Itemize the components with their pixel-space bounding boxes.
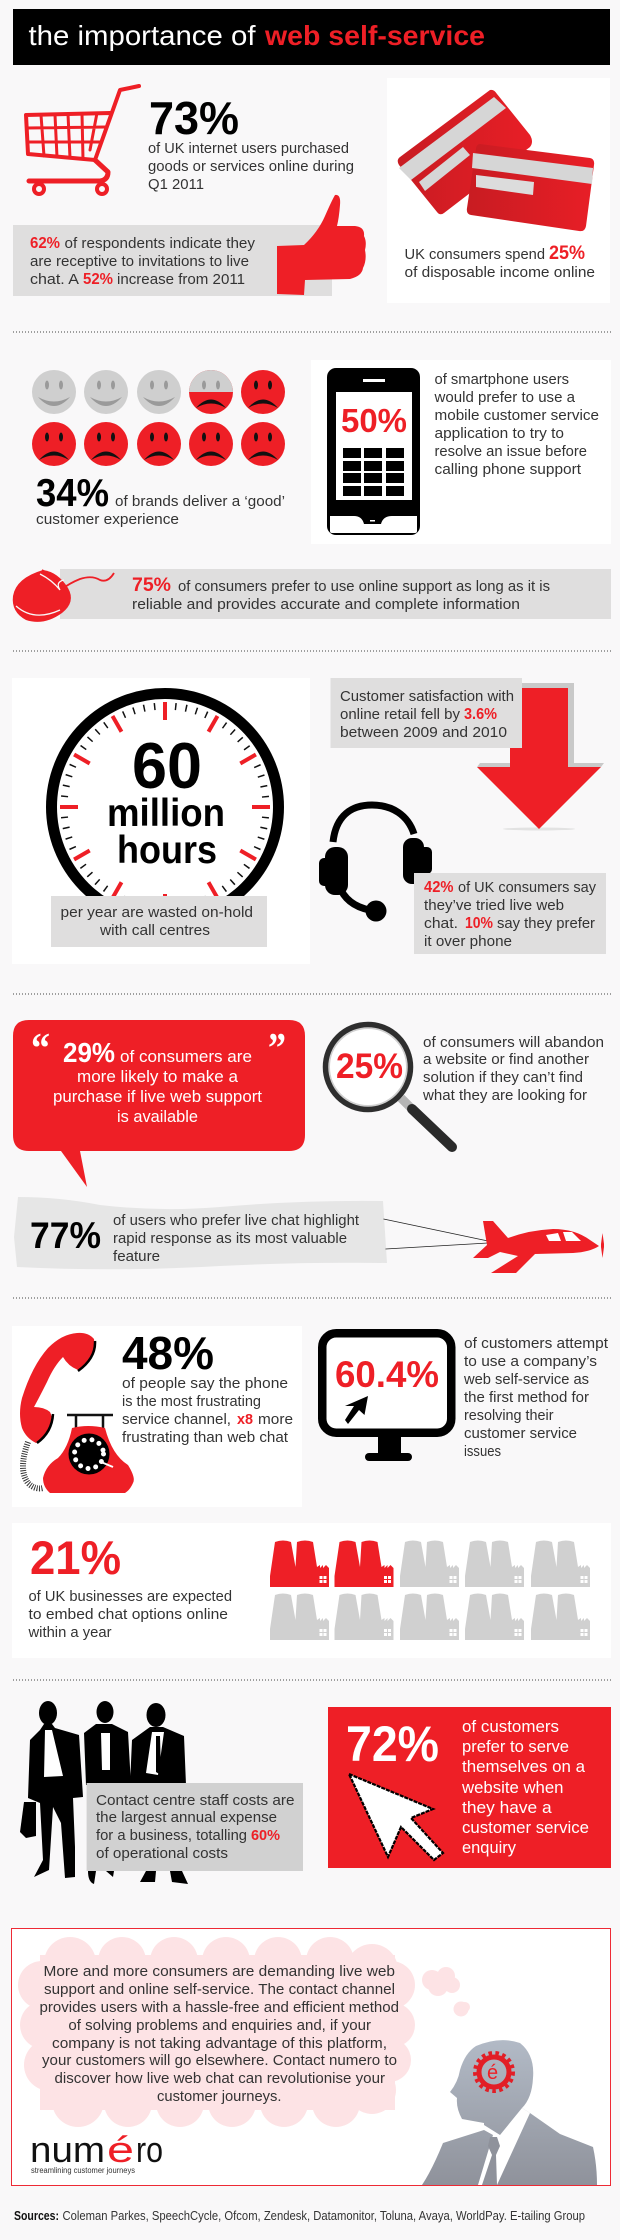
callout: 75 percent online support: 75%: [132, 575, 171, 596]
text: 48 percent phone frustrating: more: [258, 1411, 293, 1428]
icon: magnifying glass: [326, 1024, 452, 1147]
callout: 62 percent live chat: 62%: [30, 235, 60, 252]
callout: 42 percent live chat: 10%: [465, 915, 493, 932]
text: prefer to serve themselves: enquiry: [462, 1838, 516, 1857]
text: closing paragraph: [40, 1963, 399, 2105]
title banner: the importance of: [28, 20, 256, 51]
stat: 34 percent good experience: 34%: [36, 472, 109, 515]
stat: 73 percent online purchases: [148, 92, 354, 193]
callout: 42 percent live chat: say they prefer: [497, 915, 595, 932]
text: customers attempt web self-service: customer service: [464, 1425, 577, 1442]
text: 25 percent of income: 25%: [549, 243, 585, 264]
speech bubble: 29 percent: purchase if live web support: [53, 1087, 262, 1106]
text: abandon a website: what they are looking for: [422, 1087, 587, 1104]
callout: 42 percent live chat: it over phone: [424, 933, 512, 950]
text: prefer to serve themselves: of customers: [462, 1717, 559, 1736]
callout: 42 percent live chat: they’ve tried live web: [424, 897, 564, 914]
text: prefer to serve themselves: they have a: [462, 1798, 552, 1817]
panel: telephone 48 percent: [12, 1326, 302, 1507]
text: customers attempt web self-service: [463, 1335, 609, 1460]
panel: closing message: [12, 1928, 610, 2186]
logo: numero: é: [107, 2129, 134, 2170]
icon: clock face: [52, 694, 278, 920]
title banner: [13, 9, 610, 65]
title banner: web self-service: [264, 20, 485, 51]
text: 48 percent phone frustrating: 48%: [122, 1327, 214, 1379]
icon: plane towing banner: [384, 1219, 604, 1273]
text: 60 million hours: 60: [132, 729, 202, 802]
text: customers attempt web self-service: issues: [464, 1443, 501, 1460]
text: 21 percent chat options: [28, 1531, 232, 1641]
illustration: man with gear in head: é: [487, 2062, 498, 2084]
icon: rotary telephone: [20, 1333, 134, 1493]
text: 48 percent phone frustrating: is the most frustrating: [122, 1393, 261, 1410]
callout: customer satisfaction fell: [330, 678, 522, 748]
text: closing paragraph: company is not taking advantage of this platform,: [52, 2035, 387, 2052]
text: closing paragraph: customer journeys.: [157, 2088, 282, 2105]
text: customers attempt web self-service: resolving their: [464, 1407, 554, 1424]
text: 21 percent chat options: of UK businesses are expected: [28, 1588, 232, 1605]
text: customers attempt web self-service: to use a company’s: [464, 1353, 597, 1370]
text: 48 percent phone frustrating: frustrating than web chat: [122, 1429, 289, 1446]
icon: business people silhouettes: [20, 1701, 188, 1884]
text: 48 percent phone frustrating: [122, 1327, 293, 1446]
text: closing paragraph: support and online self-service. The contact channel: [44, 1981, 395, 1998]
icon: shopping cart: [26, 86, 139, 194]
speech bubble: 29 percent: “: [31, 1026, 50, 1072]
logo: numero: num: [30, 2129, 105, 2170]
stat: 73 percent online purchases: goods or services online during: [148, 158, 354, 175]
text: 25 percent of income: [404, 243, 595, 281]
text: closing paragraph: discover how live web chat can revolutionise your: [54, 2070, 385, 2087]
icon: monitor 60.4 percent: 60.4%: [335, 1354, 439, 1395]
callout: 62 percent live chat: [13, 225, 332, 296]
panel: 21 percent of businesses: [12, 1523, 611, 1658]
text: 25 percent of income: UK consumers spend: [404, 246, 545, 263]
callout: contact centre staff costs: for a business, totalling: [96, 1827, 247, 1844]
text: customers attempt web self-service: of customers attempt: [464, 1335, 609, 1352]
text: 60 million hours: [107, 729, 225, 872]
callout: 75 percent online support: of consumers prefer to use online support as long as it is: [178, 578, 550, 595]
chart: factory pictogram: [270, 1540, 590, 1640]
callout: 42 percent live chat: 42%: [424, 879, 454, 896]
stat: 73 percent online purchases: of UK internet users purchased: [148, 140, 349, 157]
callout: customer satisfaction fell: between 2009 and 2010: [340, 724, 507, 741]
text: smartphone users: would prefer to use a: [433, 389, 576, 406]
speech bubble: 29 percent: [13, 1020, 305, 1187]
text: customers attempt web self-service: the first method for: [464, 1389, 589, 1406]
icon: computer mouse: [13, 570, 114, 622]
panel: 72 percent self serve: [328, 1707, 611, 1868]
text: 25 percent of income: of disposable income online: [404, 264, 595, 281]
text: closing paragraph: More and more consumers are demanding live web: [44, 1963, 395, 1980]
icon: smartphone: [327, 368, 420, 535]
text: smartphone users: of smartphone users: [434, 371, 569, 388]
callout: 62 percent live chat: of respondents indicate they: [64, 235, 256, 252]
text: closing paragraph: of solving problems and enquiries and, if your: [68, 2017, 371, 2034]
stat: 73 percent online purchases: Q1 2011: [148, 176, 204, 193]
stat: 34 percent good experience: [36, 472, 285, 528]
caption: wasted on hold: [51, 896, 267, 947]
chart: smiley faces 34 percent: [32, 370, 285, 466]
callout: 75 percent online support: reliable and provides accurate and complete information: [132, 596, 520, 613]
text: smartphone users: mobile customer service: [434, 407, 599, 424]
icon: smartphone: 50%: [341, 402, 407, 439]
panel: credit cards spend: [387, 78, 610, 303]
text: prefer to serve themselves: prefer to serve: [462, 1737, 569, 1756]
stat: 34 percent good experience: customer experience: [36, 511, 179, 528]
speech bubble: 29 percent: of consumers are: [120, 1047, 252, 1066]
text: 72 percent: 72%: [346, 1716, 439, 1772]
text: prefer to serve themselves: customer service: [462, 1818, 589, 1837]
callout: customer satisfaction fell: online retail fell by: [340, 706, 460, 723]
text: abandon a website: solution if they can’t find: [423, 1069, 583, 1086]
text: customers attempt web self-service: web self-service as: [463, 1371, 589, 1388]
callout: contact centre staff costs: [87, 1783, 303, 1871]
caption: wasted on hold: per year are wasted on-hold: [60, 904, 253, 921]
text: closing paragraph: provides users with a hassle-free and efficient method: [40, 1999, 399, 2016]
text: smartphone users: calling phone support: [434, 461, 582, 478]
callout: 42 percent live chat: [414, 873, 606, 954]
arrow: satisfaction falling: [477, 683, 604, 830]
stat: 34 percent good experience: of brands deliver a ‘good’: [115, 493, 285, 510]
callout: 42 percent live chat: chat.: [424, 915, 458, 932]
text: 48 percent phone frustrating: x8: [237, 1411, 253, 1428]
banner: 77 percent rapid response: feature: [113, 1248, 160, 1265]
banner: 77 percent rapid response: of users who prefer live chat highlight: [113, 1212, 360, 1229]
banner: 77 percent rapid response: [14, 1197, 387, 1269]
icon: monitor 60.4 percent: [322, 1333, 451, 1461]
callout: contact centre staff costs: of operational costs: [96, 1845, 228, 1862]
text: abandon a website: [422, 1034, 604, 1104]
text: smartphone users: application to try to: [434, 425, 564, 442]
callout: 62 percent live chat: are receptive to invitations to live: [30, 253, 249, 270]
banner: 77 percent rapid response: rapid response as its most valuable: [113, 1230, 347, 1247]
speech bubble: 29 percent: 29%: [63, 1037, 115, 1068]
stat: 73 percent online purchases: 73%: [149, 92, 239, 144]
callout: customer satisfaction fell: 3.6%: [464, 706, 497, 723]
text: abandon a website: a website or find another: [423, 1051, 589, 1068]
icon: credit cards: [398, 90, 594, 231]
callout: 42 percent live chat: of UK consumers say: [458, 879, 596, 896]
text: abandon a website: of consumers will abandon: [423, 1034, 604, 1051]
text: 21 percent chat options: to embed chat options online: [28, 1606, 228, 1623]
text: 48 percent phone frustrating: service channel,: [122, 1411, 231, 1428]
panel: smartphone 50 percent: [311, 360, 611, 544]
icon: pointer cursor: [349, 1774, 443, 1860]
speech bubble: 29 percent: ”: [268, 1026, 286, 1072]
panel: clock 60 million hours: [12, 678, 310, 964]
icon: magnifying glass: 25%: [336, 1047, 403, 1086]
text: prefer to serve themselves: [461, 1717, 589, 1857]
callout: 62 percent live chat: chat. A: [30, 271, 79, 288]
logo: numero: [30, 2129, 163, 2175]
logo: numero: ro: [136, 2129, 163, 2170]
sources: Sources:: [14, 2208, 59, 2223]
speech bubble: 29 percent: more likely to make a: [77, 1067, 239, 1086]
text: prefer to serve themselves: website when: [461, 1778, 564, 1797]
text: 21 percent chat options: within a year: [28, 1624, 111, 1641]
illustration: man with gear in head: [422, 2040, 597, 2185]
callout: contact centre staff costs: Contact centre staff costs are: [96, 1792, 294, 1809]
text: smartphone users: [433, 371, 599, 478]
caption: wasted on hold: with call centres: [99, 922, 210, 939]
callout: contact centre staff costs: 60%: [251, 1827, 280, 1844]
text: 60 million hours: million: [107, 792, 225, 835]
speech bubble: 29 percent: is available: [117, 1107, 198, 1126]
icon: thumbs up: [277, 195, 366, 295]
banner: 77 percent rapid response: 77%: [30, 1215, 101, 1256]
text: 60 million hours: hours: [117, 829, 217, 872]
callout: 75 percent online support: [60, 569, 611, 619]
text: prefer to serve themselves: themselves on a: [462, 1757, 586, 1776]
callout: customer satisfaction fell: Customer satisfaction with: [340, 688, 514, 705]
text: closing paragraph: your customers will go elsewhere. Contact numero to: [42, 2052, 397, 2069]
thought cloud: [18, 1937, 470, 2127]
callout: contact centre staff costs: the largest annual expense: [96, 1809, 277, 1826]
logo: numero: streamlining customer journeys: [31, 2166, 135, 2175]
text: 48 percent phone frustrating: of people say the phone: [122, 1375, 288, 1392]
callout: 62 percent live chat: 52%: [83, 271, 113, 288]
icon: headset: [319, 805, 432, 922]
text: 21 percent chat options: 21%: [30, 1531, 121, 1584]
text: smartphone users: resolve an issue before: [434, 443, 587, 460]
callout: 62 percent live chat: increase from 2011: [117, 271, 245, 288]
